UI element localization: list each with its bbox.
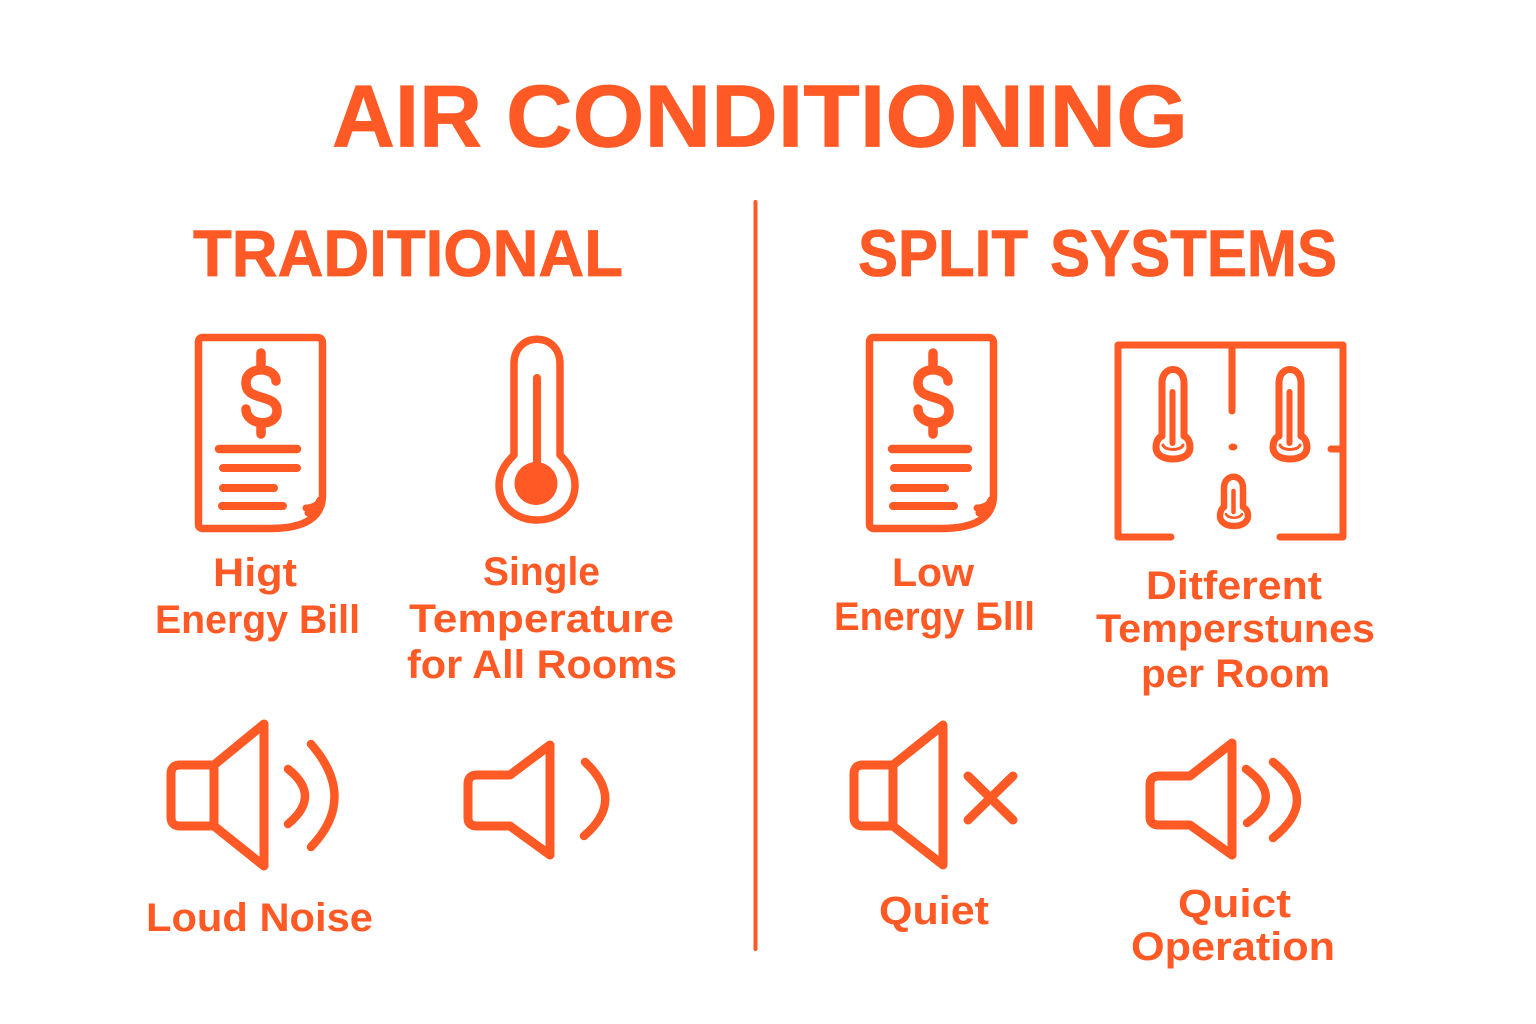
label: quiet operation: Quict: [1178, 882, 1291, 926]
floor plan walls: [1118, 345, 1343, 537]
thermometer: room one: [1156, 370, 1190, 459]
divider between columns: [754, 202, 758, 949]
label: low energy bill: Low: [892, 551, 974, 595]
title: CONDITIONING: [506, 66, 1188, 166]
icon: low energy bill: [870, 338, 994, 528]
label: single temperature: Single: [483, 550, 600, 594]
icon: high energy bill: [198, 338, 322, 528]
label: loud noise: Loud Noise: [146, 896, 373, 940]
label: single temperature: [407, 550, 677, 687]
icon: quiet operation speaker: [1150, 743, 1297, 855]
label: low energy bill: Energy Бlll: [834, 595, 1035, 639]
label: different temperatures: [1096, 564, 1375, 696]
label: high energy bill: [155, 551, 360, 642]
label: quiet operation: [1131, 882, 1335, 969]
heading: split systems: SPLIT: [858, 216, 1028, 290]
label: single temperature: Temperature: [409, 597, 674, 641]
label: high energy bill: Higt: [213, 551, 297, 595]
label: single temperature: for All Rooms: [407, 643, 677, 687]
label: different temperatures: Ditferent: [1146, 564, 1322, 608]
label: different temperatures: per Room: [1141, 652, 1330, 696]
icon: rooms with different temperatures: [1118, 345, 1343, 537]
icon: loud speaker: [171, 724, 334, 866]
room dot: [1228, 444, 1238, 450]
thermometer: room three: [1220, 477, 1248, 526]
label: high energy bill: Energy Bill: [155, 598, 360, 642]
thermometer: room two: [1273, 370, 1307, 459]
icon: quieter speaker: [468, 745, 605, 855]
heading: split systems: [858, 216, 1337, 290]
heading: traditional: TRADITIONAL: [193, 216, 623, 290]
label: low energy bill: [834, 551, 1035, 639]
label: quiet: Quiet: [879, 889, 989, 933]
label: quiet operation: Operation: [1131, 925, 1335, 969]
icon: muted speaker: [854, 725, 1013, 865]
title: AIR: [332, 66, 482, 166]
label: different temperatures: Temperstunes: [1096, 607, 1375, 651]
icon: single thermometer: [499, 339, 575, 520]
heading: split systems: SYSTEMS: [1050, 216, 1337, 290]
